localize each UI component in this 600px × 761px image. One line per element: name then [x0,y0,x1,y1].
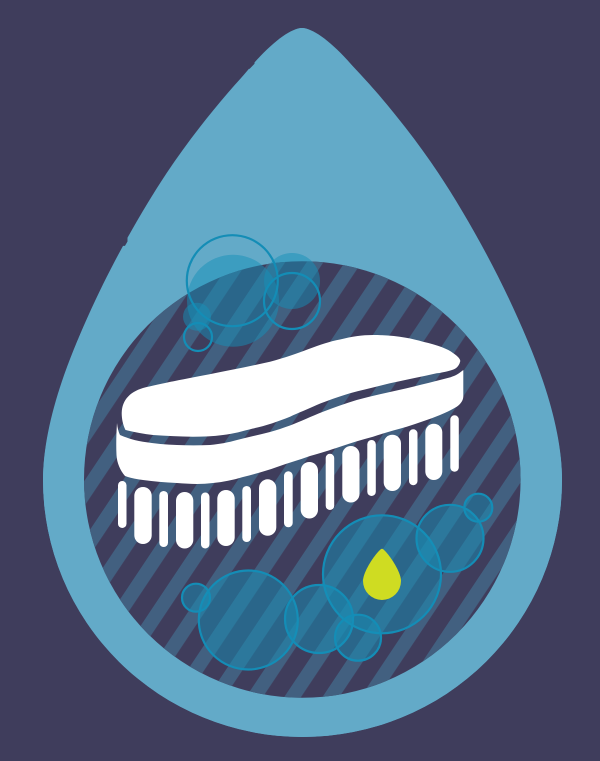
small yellow-green drop [363,549,401,600]
lower soap bubbles [182,494,492,670]
brush lower body [116,370,463,484]
brush top face [122,335,460,437]
striped inner circle [84,261,521,698]
bristles [118,415,459,548]
brush [116,335,463,548]
upper soap bubbles [183,235,320,351]
